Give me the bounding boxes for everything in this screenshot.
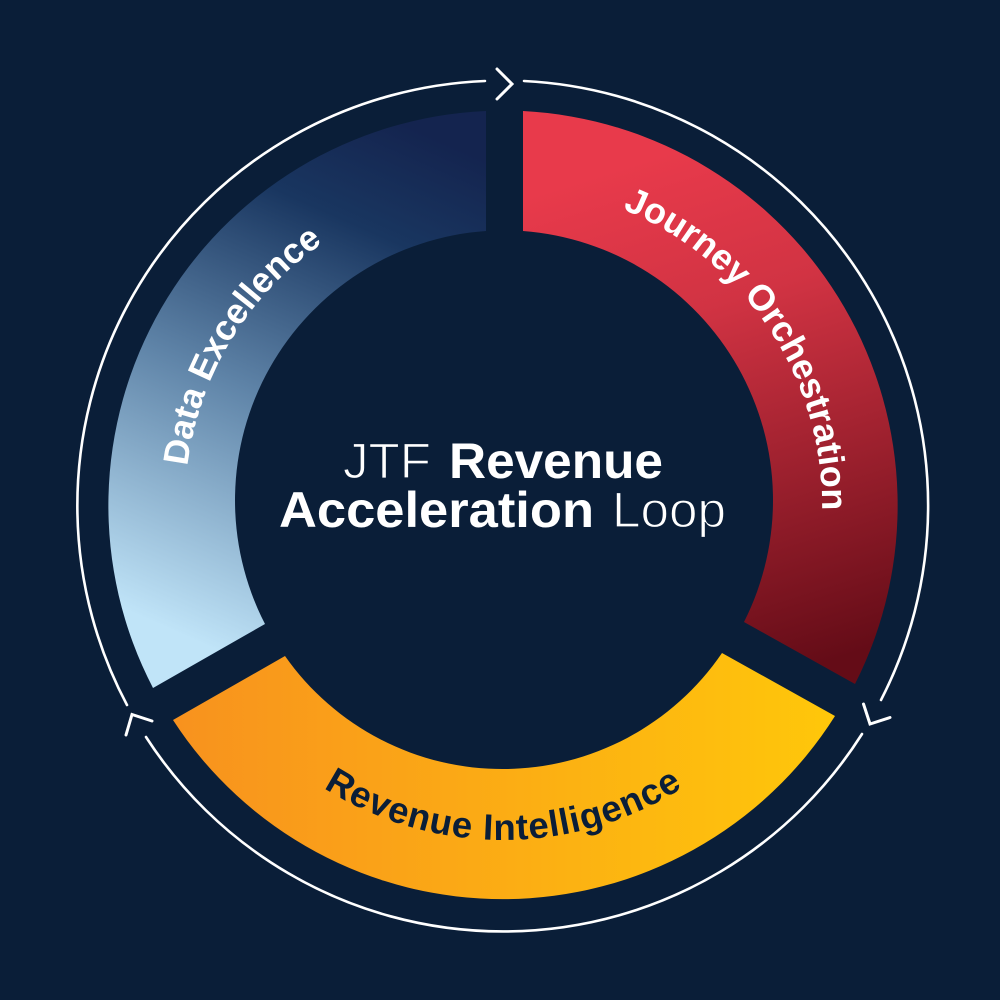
orange arc band bbox=[173, 653, 835, 899]
center title bbox=[279, 433, 726, 538]
arrow: left chevron bbox=[126, 714, 152, 735]
ring arc: left arrow to top arrow bbox=[77, 81, 485, 705]
title word: Revenue: Revenue bbox=[449, 433, 663, 489]
blue arc band bbox=[108, 111, 486, 688]
label: Journey Orchestration: Journey Orchestration bbox=[625, 189, 846, 508]
arrow: right chevron bbox=[864, 704, 890, 724]
outer loop ring bbox=[77, 81, 928, 931]
title word: JTF: JTF bbox=[343, 433, 431, 489]
arrow: top chevron bbox=[497, 69, 512, 99]
segment: Revenue Intelligence bbox=[173, 653, 835, 900]
segment: Data Excellence bbox=[108, 111, 486, 688]
title word: Loop: Loop bbox=[612, 482, 726, 538]
label: Revenue Intelligence: Revenue Intelligence bbox=[326, 768, 680, 840]
ring arc: right arrow to left arrow bbox=[146, 734, 862, 931]
label: Data Excellence: Data Excellence bbox=[163, 231, 320, 464]
red arc band bbox=[523, 111, 898, 684]
title word: Acceleration: Acceleration bbox=[279, 482, 594, 538]
segment: Journey Orchestration bbox=[523, 111, 898, 684]
ring arc: top to right arrow bbox=[524, 81, 928, 700]
